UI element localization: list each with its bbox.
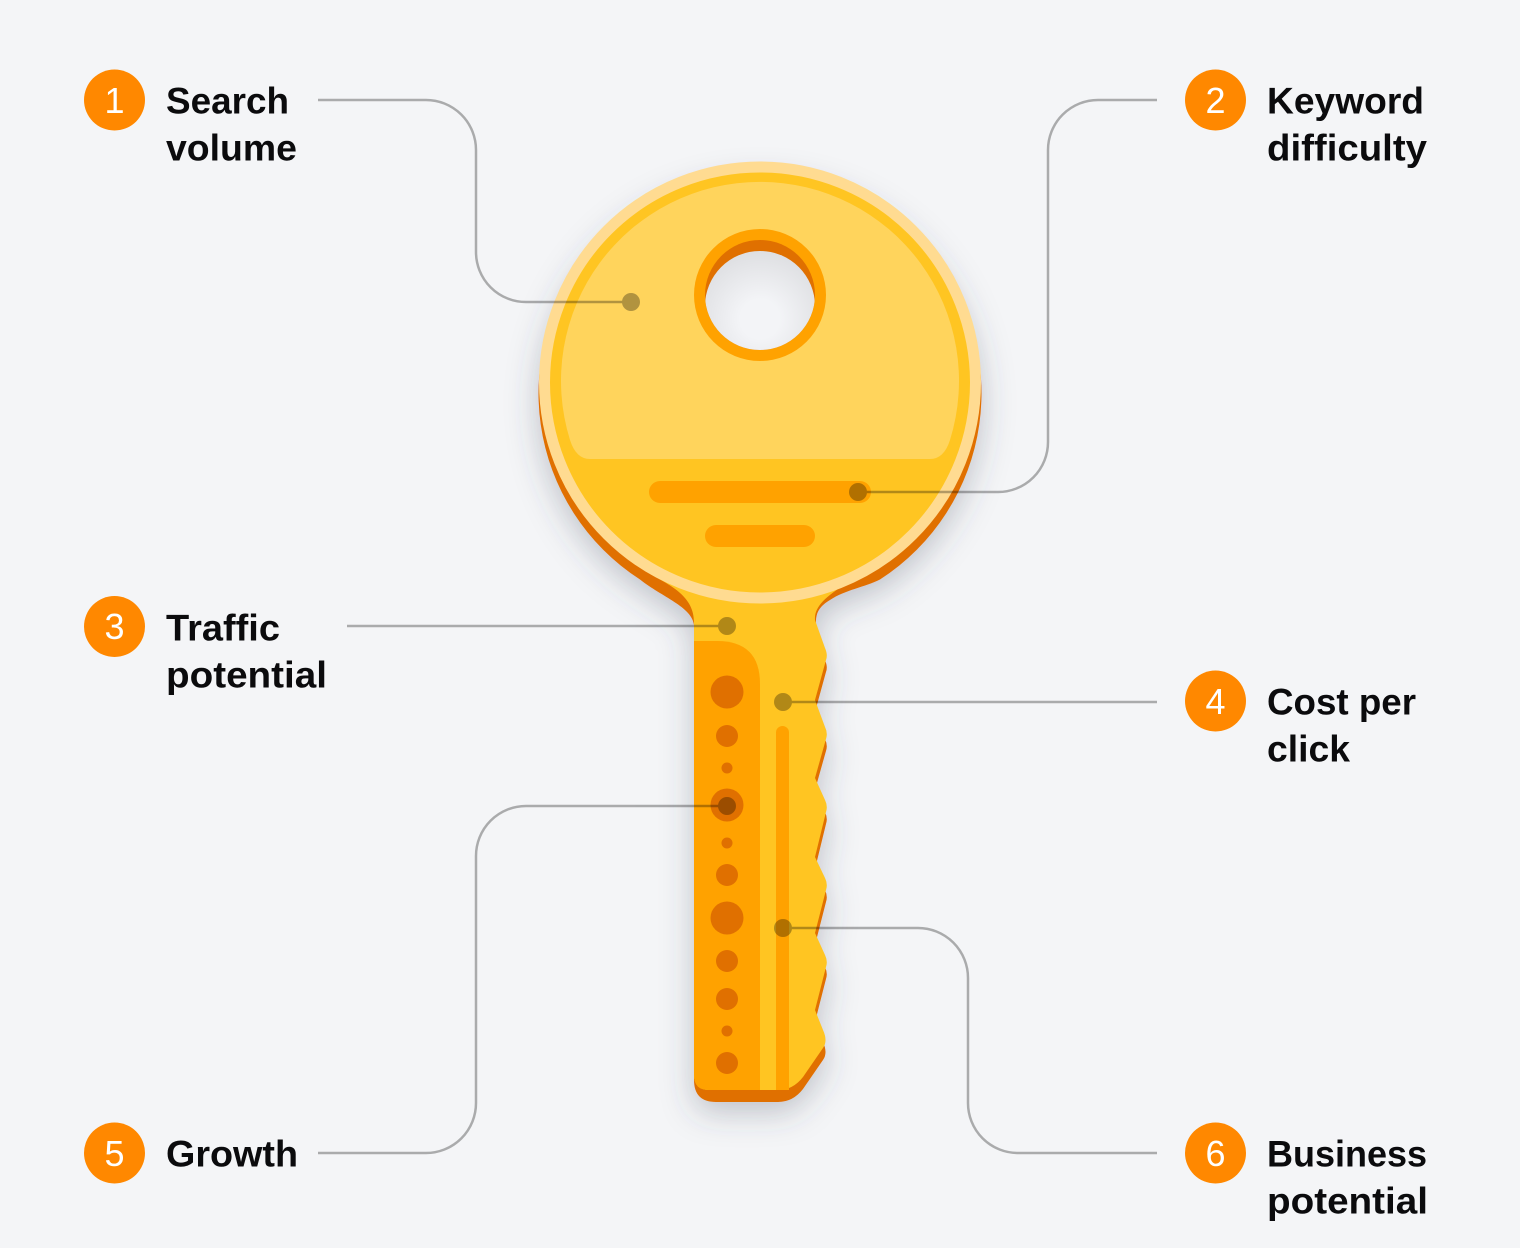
item 5: growth: 5 bbox=[104, 1133, 125, 1174]
item 6: business potential bbox=[1185, 1122, 1428, 1222]
light upper panel of head bbox=[561, 182, 959, 459]
item 3: traffic potential bbox=[84, 596, 327, 696]
connector 5: growth bbox=[318, 797, 736, 1153]
long bar bbox=[649, 481, 871, 503]
item 6: business potential: potential bbox=[1267, 1180, 1428, 1222]
item 5: growth bbox=[84, 1122, 298, 1184]
connector 6: business potential bbox=[774, 919, 1157, 1153]
key shank bbox=[650, 574, 860, 1090]
item 2: keyword difficulty: Keyword bbox=[1267, 80, 1424, 122]
item 6: business potential: 6 bbox=[1205, 1133, 1226, 1174]
item 3: traffic potential: Traffic bbox=[166, 608, 280, 648]
item 2: keyword difficulty bbox=[1185, 70, 1427, 168]
item 1: search volume: 1 bbox=[104, 80, 125, 121]
connector 3: traffic potential bbox=[347, 617, 736, 635]
item 5: growth: Growth bbox=[166, 1134, 298, 1174]
item 4: cost per click: Cost per bbox=[1267, 682, 1416, 722]
keyhole bbox=[694, 229, 826, 361]
connector 4: cost per click bbox=[774, 693, 1157, 711]
item 3: traffic potential: 3 bbox=[104, 606, 125, 647]
item 4: cost per click bbox=[1185, 670, 1416, 770]
pale outer ring bbox=[544, 167, 976, 598]
connector 1: search volume bbox=[318, 100, 640, 311]
groove stripe bbox=[776, 726, 789, 1090]
short bar bbox=[705, 525, 815, 547]
key head yellow disc bbox=[548, 170, 972, 594]
item 1: search volume: Search bbox=[166, 80, 289, 122]
item 1: search volume: volume bbox=[166, 128, 297, 168]
item 2: keyword difficulty: difficulty bbox=[1267, 128, 1427, 168]
connector 2: keyword difficulty bbox=[849, 100, 1157, 501]
shank dots bbox=[710, 676, 744, 1074]
key illustration bbox=[539, 167, 982, 1102]
item 1: search volume bbox=[84, 70, 297, 168]
item 4: cost per click: 4 bbox=[1205, 681, 1226, 722]
item 6: business potential: Business bbox=[1267, 1134, 1427, 1174]
item 4: cost per click: click bbox=[1267, 728, 1350, 770]
key dark base with shadow bbox=[539, 172, 982, 1102]
item 2: keyword difficulty: 2 bbox=[1205, 80, 1226, 121]
item 3: traffic potential: potential bbox=[166, 654, 327, 696]
orange shank panel bbox=[694, 641, 760, 1090]
